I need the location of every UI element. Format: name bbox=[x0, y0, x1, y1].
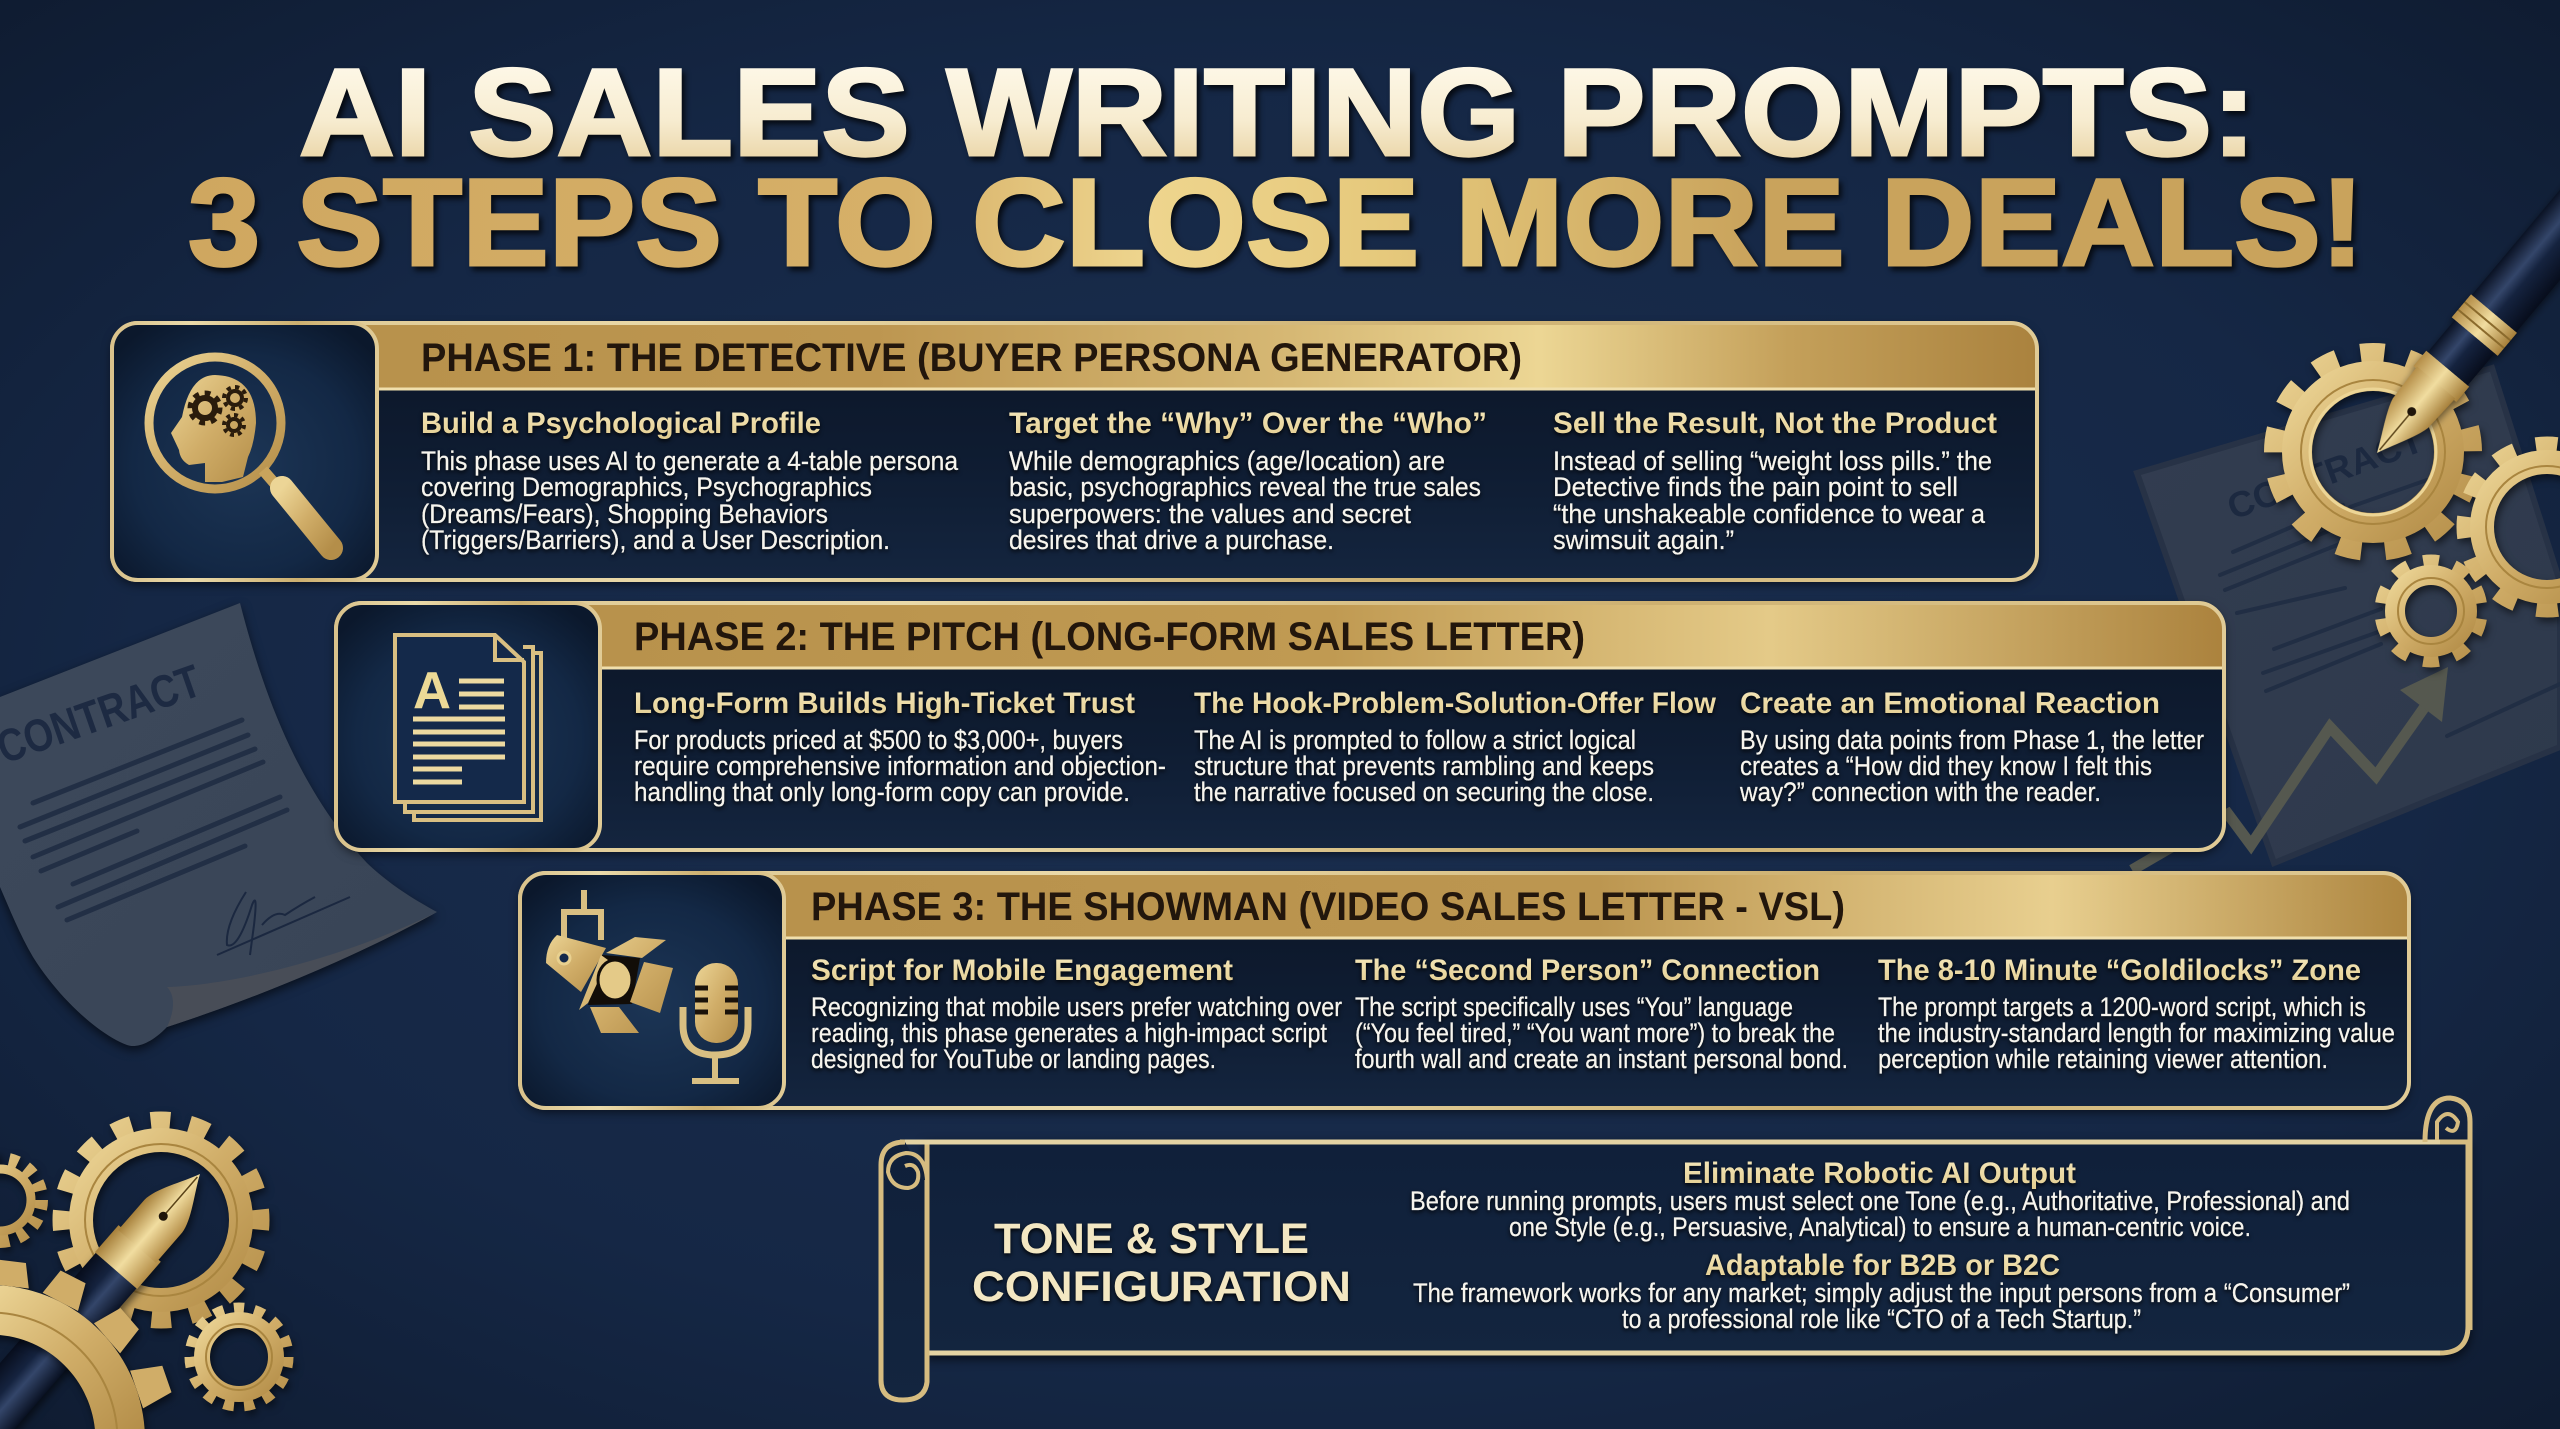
panel: phase 2 the pitch bbox=[336, 603, 2224, 850]
phase 1 column: sell the result: “the unshakeable confidence to wear a bbox=[1553, 499, 1986, 529]
phase 1 column: psychological profile bbox=[421, 407, 959, 555]
phase 1 column: sell the result bbox=[1553, 407, 1997, 555]
phase 2 icon: document stack bbox=[336, 603, 600, 850]
phase 2 column: emotional reaction: By using data points from Phase 1, the letter bbox=[1740, 725, 2204, 755]
large gear, bottom left corner bbox=[0, 1260, 172, 1429]
scroll text: eliminate robotic output: Before running prompts, users must select one Tone (e.g., Authoritative, Professional) and bbox=[1410, 1186, 2350, 1216]
phase 2 column: high-ticket trust bbox=[634, 687, 1166, 807]
phase 3 column: mobile engagement: Script for Mobile Engagement bbox=[811, 954, 1233, 987]
scroll text: adaptable for b2b or b2c: Adaptable for B2B or B2C bbox=[1705, 1249, 2060, 1282]
scroll text: eliminate robotic output bbox=[1410, 1157, 2350, 1242]
phase 2 column: hook flow: structure that prevents rambling and keeps bbox=[1194, 751, 1654, 781]
phase 3 heading: PHASE 3: THE SHOWMAN (VIDEO SALES LETTER - VSL) bbox=[811, 885, 1845, 929]
phase 2 column: hook flow: The AI is prompted to follow a strict logical bbox=[1194, 725, 1636, 755]
phase 1 column: psychological profile: covering Demographics, Psychographics bbox=[421, 472, 872, 502]
phase 3 column: goldilocks zone: The 8-10 Minute “Goldilocks” Zone bbox=[1878, 954, 2361, 987]
phase 3 column: second person: The “Second Person” Connection bbox=[1355, 954, 1820, 987]
phase 1 column: why over who: Target the “Why” Over the “Who” bbox=[1009, 407, 1487, 440]
phase 2 icon: document stack: A bbox=[413, 662, 451, 720]
phase 2 column: high-ticket trust: Long-Form Builds High-Ticket Trust bbox=[634, 687, 1135, 720]
phase 1 column: psychological profile: (Triggers/Barriers), and a User Description. bbox=[421, 525, 890, 555]
phase 2 column: emotional reaction bbox=[1739, 687, 2204, 807]
pen, right bbox=[2354, 104, 2560, 472]
scroll text: eliminate robotic output: Eliminate Robotic AI Output bbox=[1683, 1157, 2076, 1190]
phase 1 column: sell the result: Instead of selling “weight loss pills.” the bbox=[1553, 446, 1992, 476]
contract document, left bbox=[0, 603, 437, 1046]
gears, bottom left bbox=[0, 1120, 288, 1406]
phase 1 column: psychological profile: (Dreams/Fears), Shopping Behaviors bbox=[421, 499, 828, 529]
phase 3 column: mobile engagement: designed for YouTube or landing pages. bbox=[811, 1044, 1216, 1074]
phase 1 column: why over who: superpowers: the values and secret bbox=[1009, 499, 1411, 529]
phase 2 column: hook flow bbox=[1194, 687, 1717, 807]
phase 2 column: emotional reaction: way?” connection with the reader. bbox=[1739, 777, 2101, 807]
panel: phase 3 the showman bbox=[520, 873, 2409, 1108]
phase 1 column: why over who: desires that drive a purchase. bbox=[1009, 525, 1334, 555]
phase 3 column: goldilocks zone: perception while retaining viewer attention. bbox=[1878, 1044, 2328, 1074]
scroll title: CONFIGURATION bbox=[972, 1263, 1351, 1311]
scroll title bbox=[972, 1215, 1351, 1311]
phase 3 column: mobile engagement: reading, this phase generates a high-impact script bbox=[811, 1018, 1327, 1048]
title bbox=[188, 44, 2364, 292]
phase 2 column: hook flow: the narrative focused on securing the close. bbox=[1194, 777, 1654, 807]
phase 1 column: psychological profile: Build a Psychological Profile bbox=[421, 407, 821, 440]
phase 2 column: hook flow: The Hook-Problem-Solution-Offer Flow bbox=[1194, 687, 1717, 720]
phase 3 header band bbox=[760, 873, 2409, 938]
phase 1 column: why over who: basic, psychographics reveal the true sales bbox=[1009, 472, 1481, 502]
phase 2 column: high-ticket trust: require comprehensive information and objection- bbox=[634, 751, 1166, 781]
phase 2 column: emotional reaction: Create an Emotional Reaction bbox=[1740, 687, 2160, 720]
phase 1 column: sell the result: swimsuit again.” bbox=[1553, 525, 1734, 555]
scroll text: adaptable for b2b or b2c bbox=[1413, 1249, 2350, 1334]
phase 3 column: second person: (“You feel tired,” “You want more”) to break the bbox=[1355, 1018, 1835, 1048]
scroll text: eliminate robotic output: one Style (e.g., Persuasive, Analytical) to ensure a human-centric voice. bbox=[1509, 1212, 2251, 1242]
pen, bottom left bbox=[0, 1156, 221, 1429]
phase 1 column: sell the result: Detective finds the pain point to sell bbox=[1553, 472, 1958, 502]
phase 3 column: goldilocks zone: the industry-standard length for maximizing value bbox=[1878, 1018, 2395, 1048]
phase 2 column: high-ticket trust: handling that only long-form copy can provide. bbox=[634, 777, 1130, 807]
phase 1 column: sell the result: Sell the Result, Not the Product bbox=[1553, 407, 1997, 440]
phase 2 heading: PHASE 2: THE PITCH (LONG-FORM SALES LETTER) bbox=[634, 615, 1585, 659]
phase 3 column: second person bbox=[1355, 954, 1848, 1074]
phase 1 column: why over who bbox=[1009, 407, 1487, 555]
title: 3 STEPS TO CLOSE MORE DEALS! bbox=[188, 154, 2364, 292]
scroll text: adaptable for b2b or b2c: The framework works for any market; simply adjust the input persons from a “Consumer” bbox=[1413, 1278, 2350, 1308]
phase 3 column: mobile engagement: Recognizing that mobile users prefer watching over bbox=[811, 992, 1342, 1022]
phase 1 column: psychological profile: This phase uses AI to generate a 4-table persona bbox=[421, 446, 959, 476]
phase 2 header band bbox=[580, 603, 2224, 668]
phase 1 heading: PHASE 1: THE DETECTIVE (BUYER PERSONA GENERATOR) bbox=[421, 336, 1522, 380]
phase 3 column: goldilocks zone: The prompt targets a 1200-word script, which is bbox=[1878, 992, 2366, 1022]
phase 1 column: why over who: While demographics (age/location) are bbox=[1009, 446, 1445, 476]
panel: phase 1 the detective bbox=[112, 323, 2037, 580]
scroll title: TONE & STYLE bbox=[994, 1215, 1309, 1263]
phase 3 column: goldilocks zone bbox=[1878, 954, 2395, 1074]
panel: tone and style scroll bbox=[881, 1098, 2470, 1400]
scroll frame bbox=[881, 1098, 2470, 1400]
phase 1 icon: magnifier with head and gears bbox=[112, 323, 377, 580]
contract document and chart arrow, right: CONTRACT bbox=[2222, 419, 2428, 528]
contract document and chart arrow, right bbox=[2132, 368, 2560, 870]
phase 3 column: second person: fourth wall and create an instant personal bond. bbox=[1355, 1044, 1848, 1074]
gears, right bbox=[2274, 353, 2560, 662]
phase 2 column: high-ticket trust: For products priced at $500 to $3,000+, buyers bbox=[634, 725, 1123, 755]
phase 3 icon: stage light and microphone bbox=[520, 873, 784, 1108]
phase 2 column: emotional reaction: creates a “How did they know I felt this bbox=[1740, 751, 2152, 781]
phase 3 column: second person: The script specifically uses “You” language bbox=[1355, 992, 1793, 1022]
phase 1 header band bbox=[360, 323, 2037, 389]
phase 3 column: mobile engagement bbox=[811, 954, 1342, 1074]
scroll text: adaptable for b2b or b2c: to a professional role like “CTO of a Tech Startup.” bbox=[1622, 1304, 2141, 1334]
title: AI SALES WRITING PROMPTS: bbox=[299, 44, 2256, 182]
